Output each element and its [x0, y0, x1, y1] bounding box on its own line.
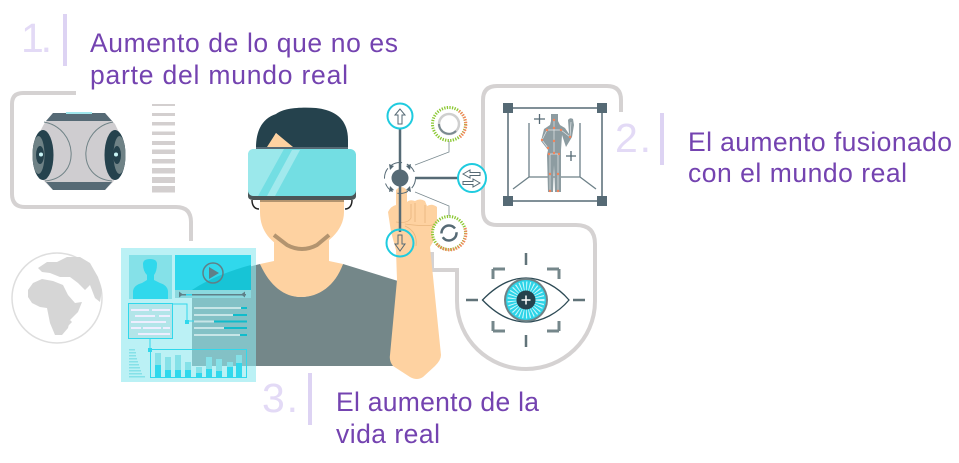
connector nodes [148, 320, 189, 352]
text box [128, 304, 172, 338]
thin leader lines [415, 141, 449, 216]
headset straps [248, 190, 356, 200]
avatar silhouette [133, 259, 168, 299]
heading 2 text: con el mundo real [688, 158, 907, 188]
face [260, 196, 344, 252]
panel background [121, 248, 256, 382]
divider 1 [63, 14, 67, 66]
heading 1 text: Aumento de lo que no es [90, 28, 398, 58]
number 3: 3. [262, 375, 298, 421]
play button [203, 263, 223, 283]
bar chart [150, 350, 246, 378]
arm and hand [388, 187, 441, 379]
mini legend stripes [129, 349, 145, 378]
spokes [400, 128, 458, 232]
illustration: man with VR headset [192, 108, 398, 366]
icon: 360 camera [32, 112, 126, 190]
heading 3 text: El aumento de la [336, 387, 539, 417]
icon: cyber eye [466, 253, 585, 347]
radial control menu [384, 104, 486, 256]
shirt [192, 264, 398, 366]
dial gauge top [432, 108, 466, 140]
video controls [175, 290, 251, 298]
holographic panel [121, 248, 256, 382]
down arrow node [386, 230, 414, 256]
visor [248, 149, 356, 196]
dial arrowheads [389, 164, 411, 192]
number 1: 1. [21, 15, 52, 61]
central dial [384, 162, 416, 194]
divider 3 [308, 373, 312, 425]
heading 1 text: parte del mundo real [90, 60, 348, 90]
heading 3 text: vida real [336, 419, 440, 449]
headset shadow on face [260, 197, 344, 202]
heading 1 [21, 14, 398, 90]
connector: camera to panel [12, 93, 191, 241]
video tile [175, 255, 251, 290]
connector lines [150, 304, 196, 350]
heading 2 text: El aumento fusionado [688, 127, 952, 157]
list bars [194, 307, 247, 336]
number 2: 2. [615, 115, 651, 161]
connector: tracking frame to eye to hand [432, 86, 621, 369]
neck [260, 236, 343, 297]
heading 3 [262, 373, 539, 449]
icon: striped bars [152, 104, 175, 192]
hair [256, 108, 348, 148]
icon: body tracking frame [503, 103, 607, 206]
avatar tile [129, 255, 172, 299]
icon: globe [12, 253, 102, 343]
dial gauge bottom [432, 216, 466, 250]
chin shadow [274, 235, 329, 249]
divider 2 [660, 113, 664, 165]
up arrow node [388, 104, 412, 128]
dial hub [392, 170, 408, 186]
heading 2 [615, 113, 952, 188]
forehead [267, 133, 293, 147]
left-right arrows node [458, 164, 486, 192]
